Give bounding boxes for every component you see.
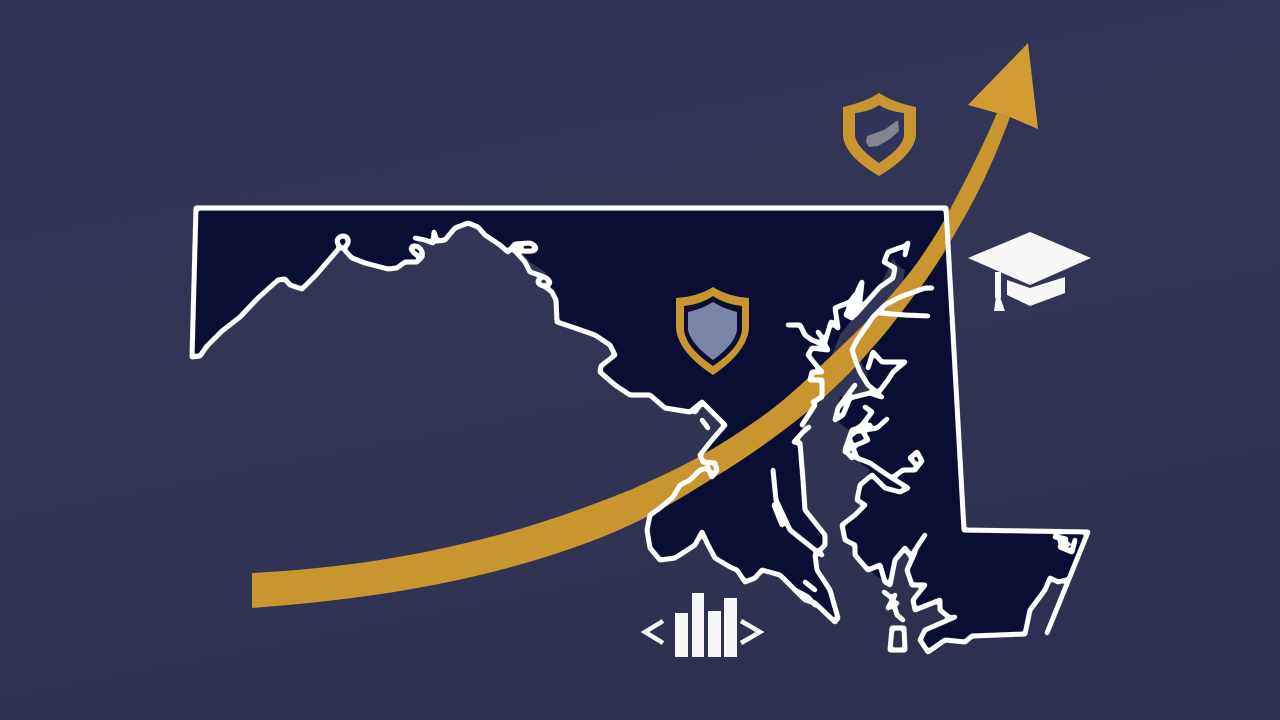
mortarboard xyxy=(968,232,1091,285)
left chevron xyxy=(645,621,663,643)
Potomac river shore xyxy=(192,223,838,622)
tassel xyxy=(994,297,1005,311)
outer gold shield xyxy=(676,287,749,375)
shield icon with blade xyxy=(843,93,916,176)
inner dark shield xyxy=(855,105,904,163)
southern islands xyxy=(884,592,905,650)
outer gold shield xyxy=(843,93,916,176)
growth arrow xyxy=(252,43,1038,608)
mid shore rivers xyxy=(842,430,1066,652)
upper bay east shore xyxy=(835,288,932,458)
grey blob xyxy=(866,120,899,147)
dark shield band xyxy=(684,296,742,366)
shield icon on map xyxy=(676,287,749,375)
arrow head xyxy=(968,43,1038,129)
arrow shaft xyxy=(252,113,1010,608)
map of Maryland: land fill xyxy=(192,208,1088,652)
map of Maryland: white outlines xyxy=(192,208,1088,652)
Ocean City inlet marks xyxy=(1055,537,1075,552)
state border xyxy=(192,208,1088,633)
Patuxent river xyxy=(773,470,822,605)
tassel cord xyxy=(995,272,1001,298)
cap base xyxy=(1007,277,1065,306)
right chevron xyxy=(741,621,760,643)
grey-blue shield face xyxy=(688,302,737,360)
bars xyxy=(675,593,737,657)
bar chart icon with chevrons xyxy=(645,593,760,657)
graduation cap icon xyxy=(968,232,1091,311)
upper bay west shore xyxy=(788,243,908,425)
